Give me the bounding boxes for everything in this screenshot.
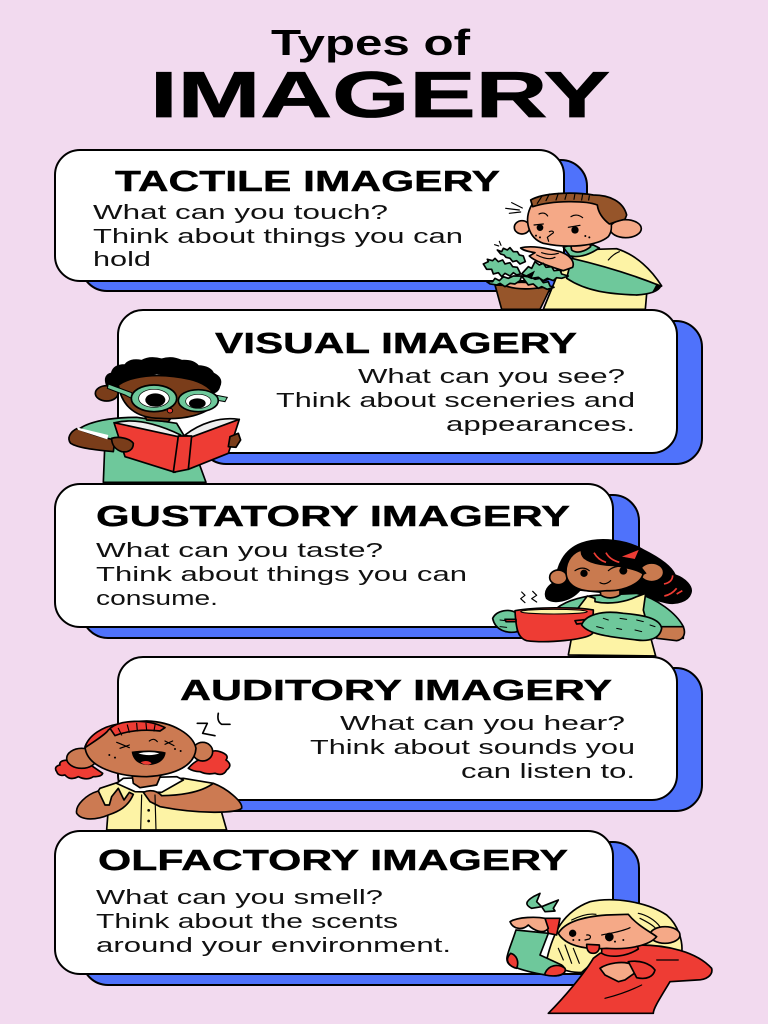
panel: visual imagery <box>118 310 702 464</box>
text: tactile: hold <box>93 248 151 271</box>
icon: boy touching plant <box>483 193 662 309</box>
text: olfactory: Think about the scents <box>96 910 398 933</box>
text: olfactory: What can you smell? <box>96 886 383 909</box>
heading: tactile: TACTILE IMAGERY <box>115 166 500 198</box>
text: olfactory <box>96 886 451 957</box>
heading: gustatory: GUSTATORY IMAGERY <box>96 501 570 533</box>
panel: gustatory imagery <box>55 484 639 638</box>
text: visual: appearances. <box>446 413 635 436</box>
text: auditory: Think about sounds you <box>310 736 635 759</box>
text: tactile <box>93 201 463 271</box>
panel: olfactory imagery <box>55 831 639 985</box>
heading: olfactory: OLFACTORY IMAGERY <box>98 845 568 877</box>
text: auditory <box>310 712 635 783</box>
text: auditory: What can you hear? <box>340 712 625 735</box>
text: tactile: What can you touch? <box>93 201 388 224</box>
text: visual: Think about sceneries and <box>276 389 635 412</box>
text: olfactory: around your environment. <box>96 934 451 957</box>
text: visual: What can you see? <box>358 365 625 388</box>
icon: boy reading book <box>69 358 241 482</box>
text: gustatory: Think about things you can <box>96 563 467 586</box>
icon: girl smelling sock <box>507 893 712 1013</box>
text: visual <box>276 365 635 436</box>
text: gustatory <box>96 539 467 610</box>
icon: girl laughing with music notes <box>56 713 242 830</box>
title: Types of <box>271 22 471 63</box>
panel: tactile imagery <box>55 150 587 291</box>
text: gustatory: What can you taste? <box>96 539 383 562</box>
text: tactile: Think about things you can <box>93 225 463 248</box>
text: gustatory: consume. <box>96 587 218 610</box>
icon: girl holding pot <box>493 540 691 656</box>
heading: visual: VISUAL IMAGERY <box>215 328 577 360</box>
text: auditory: can listen to. <box>461 760 635 783</box>
title <box>150 22 610 131</box>
heading: auditory: AUDITORY IMAGERY <box>180 675 612 707</box>
title: IMAGERY <box>150 58 610 131</box>
panel: auditory imagery <box>118 657 702 811</box>
